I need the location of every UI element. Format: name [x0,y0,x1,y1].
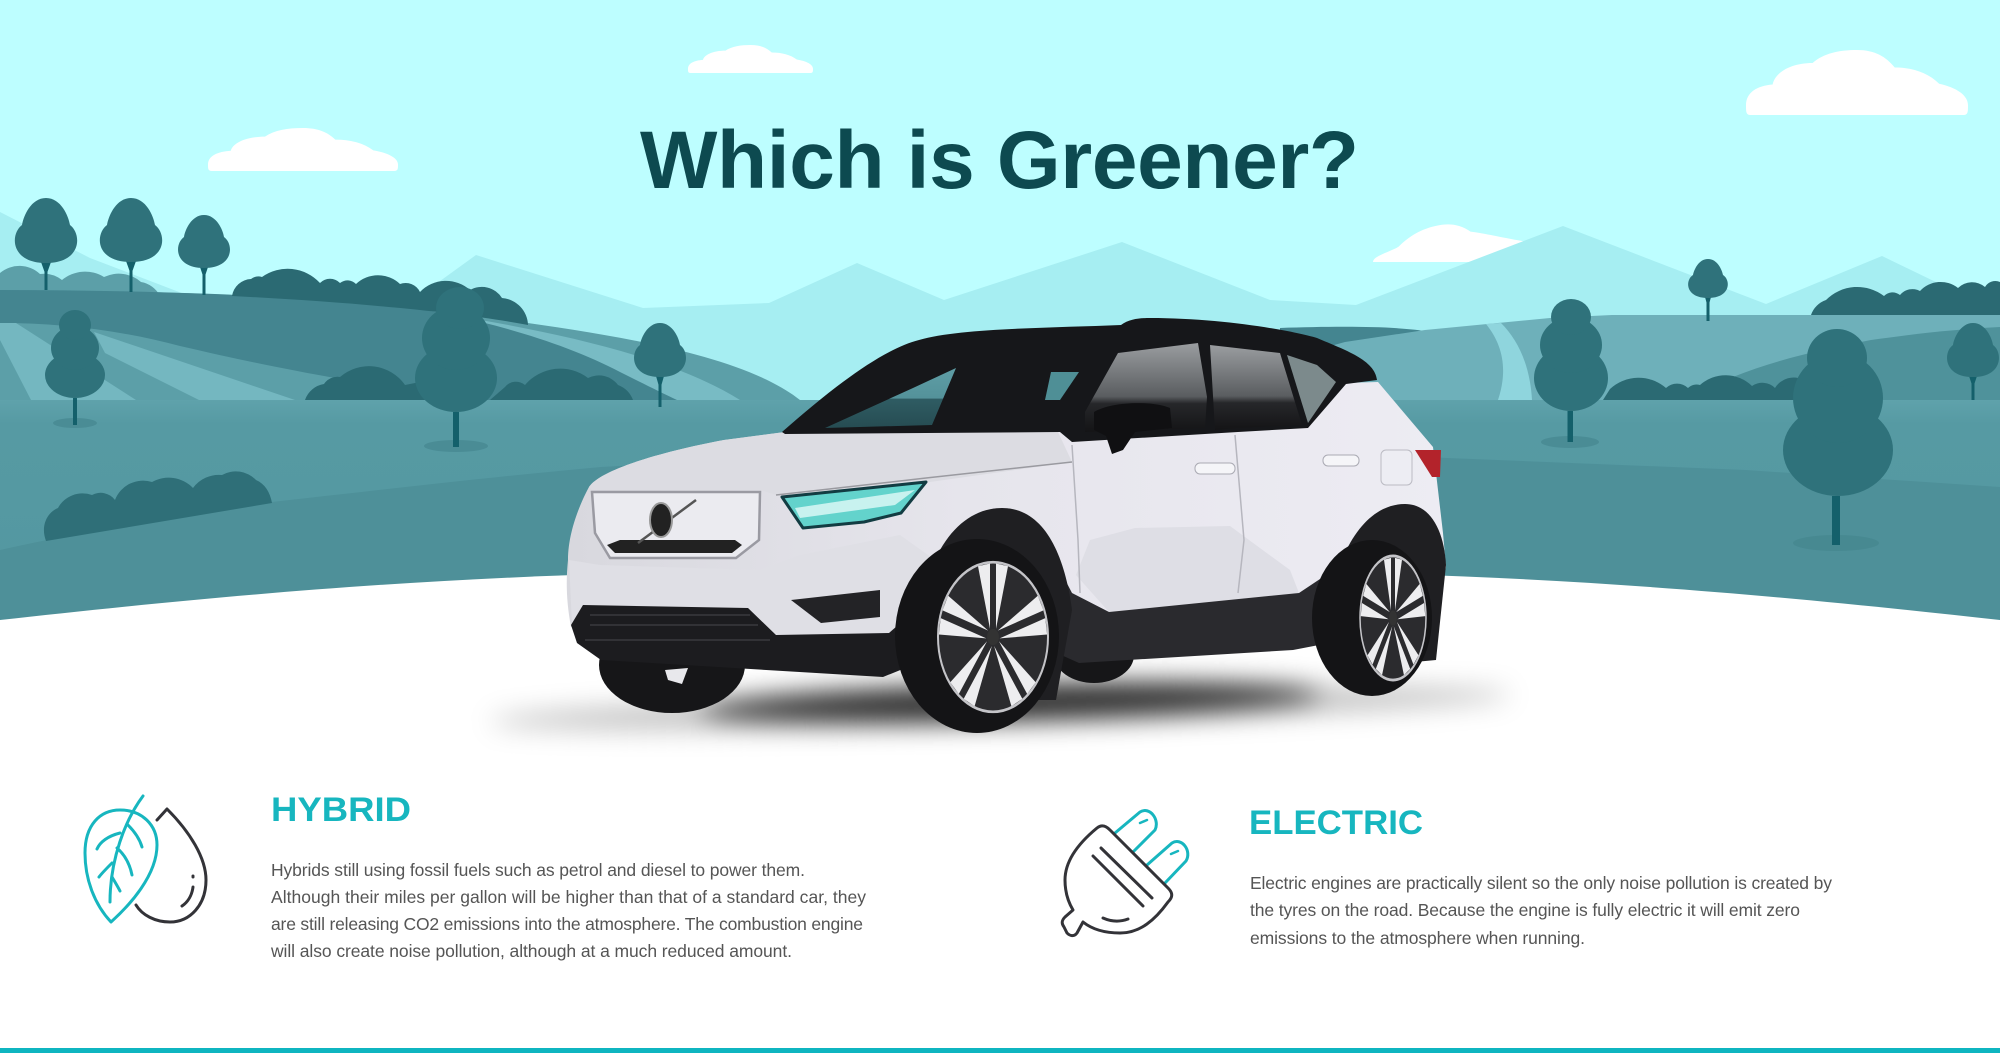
icon: leaf and water drop [85,796,206,922]
front lower trim [571,605,925,677]
far wheels [599,617,1134,713]
front side window [1085,343,1207,432]
lower door shading [1076,526,1299,612]
mountains [0,212,2000,420]
small glass pane [1045,372,1079,400]
clouds [208,45,1968,262]
hood shading [589,432,1072,496]
text block: hybrid: Hybrids still using fossil fuels such as petrol and diesel to power them. [271,860,805,880]
text block: electric [1250,873,1832,948]
foreground bush [44,471,272,541]
white ground [0,573,2000,1053]
heading: hybrid: HYBRID [271,791,411,829]
front grille panel [592,492,760,558]
door handles [1195,455,1359,474]
sky background [0,0,2000,640]
mirror [1094,403,1172,454]
rear side window [1210,345,1302,430]
trees [15,198,1999,551]
side cladding [1050,560,1345,663]
car shadow [490,671,1510,737]
headlight [782,482,926,528]
foreground field [0,400,2000,640]
front wheel [895,508,1072,733]
windshield [825,368,956,428]
roof and window frames [782,318,1377,442]
grille slats [585,615,770,640]
text block: hybrid: are still releasing CO2 emissions into the atmosphere. The combustion engine [271,914,863,934]
title: Which is Greener? [640,115,1359,206]
icon: electric plug [1062,811,1188,936]
text block: electric: emissions to the atmosphere when running. [1250,928,1585,948]
bottom bar [0,1048,2000,1053]
rear wheel [1312,504,1446,696]
heading: electric: ELECTRIC [1249,804,1423,842]
faded bush, far left [0,266,160,296]
plug body [1062,826,1172,936]
logo [638,500,696,543]
right hills with road [1280,315,2000,402]
text block: hybrid: will also create noise pollution, although at a much reduced amount. [270,941,792,961]
door lines and crease [776,435,1244,593]
charge flap [1381,450,1412,485]
bushes on the horizon [232,269,2000,400]
leaf [85,796,157,922]
bumper shading [569,535,935,640]
left hills with field strips [0,290,800,400]
plug prongs [1115,811,1188,883]
tail light [1415,450,1441,477]
rear quarter window [1287,355,1336,423]
car [490,318,1510,737]
text block: hybrid [270,860,866,961]
text block: electric: Electric engines are practically silent so the only noise pollution is created by [1250,873,1832,893]
lower darker field [0,440,2000,640]
text block: electric: the tyres on the road. Because the engine is fully electric it will emit zero [1250,900,1800,920]
text block: hybrid: Although their miles per gallon will be higher than that of a standard car, they [271,887,866,907]
water drop [136,809,206,922]
fog light [791,590,880,623]
car body [567,382,1446,650]
